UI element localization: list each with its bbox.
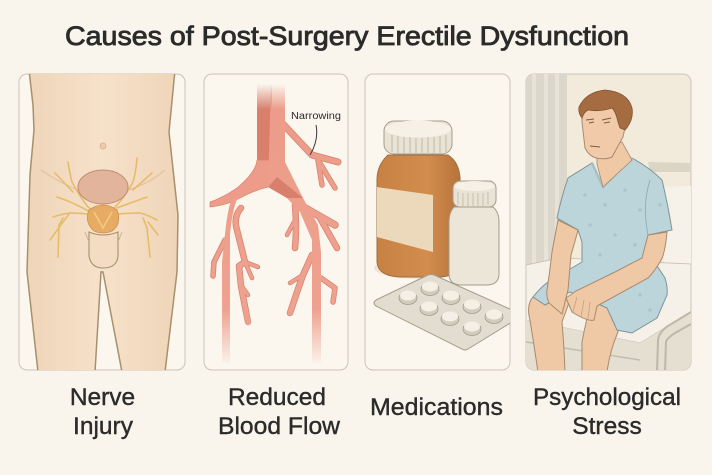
label: reduced blood flow: Reduced bbox=[228, 384, 326, 411]
label: psychological stress bbox=[533, 384, 681, 440]
left arm bbox=[547, 220, 578, 314]
label: reduced blood flow bbox=[218, 384, 340, 440]
icon: bladder bbox=[78, 170, 128, 204]
panel: nerve injury bbox=[19, 70, 185, 372]
right arm bbox=[566, 232, 667, 320]
icon: large bottle bbox=[374, 120, 466, 279]
icon: blister pack bbox=[374, 274, 512, 350]
hair bbox=[579, 90, 632, 130]
neck bbox=[597, 142, 632, 187]
callout: narrowing bbox=[291, 110, 341, 155]
label: nerve injury: Nerve bbox=[70, 384, 135, 411]
title: Causes of Post-Surgery Erectile Dysfunction bbox=[65, 21, 629, 51]
dark trunk bbox=[257, 86, 272, 160]
illustration: bed bbox=[526, 162, 691, 372]
label: reduced blood flow: Blood Flow bbox=[218, 413, 340, 440]
legs bbox=[529, 297, 570, 372]
gown bbox=[533, 158, 672, 333]
illustration: lower torso bbox=[27, 70, 178, 372]
panel: psychological stress bbox=[526, 74, 691, 372]
label: psychological stress: Stress bbox=[572, 413, 642, 440]
label: medications: Medications bbox=[370, 394, 503, 421]
icon: nerves bbox=[50, 158, 158, 257]
main vessels bbox=[210, 160, 275, 207]
label: nerve injury bbox=[70, 384, 135, 440]
label: nerve injury: Injury bbox=[73, 413, 134, 440]
face bbox=[586, 118, 611, 147]
illustration: arteries bbox=[210, 84, 338, 363]
callout: narrowing: Narrowing bbox=[291, 110, 341, 122]
panel: medications bbox=[365, 74, 512, 370]
illustration: man bbox=[529, 90, 672, 372]
icon: small bottle bbox=[449, 181, 499, 285]
icon: penis bbox=[89, 232, 118, 268]
illustration: curtain bbox=[526, 74, 567, 274]
label: psychological stress: Psychological bbox=[533, 384, 681, 411]
icon: prostate bbox=[87, 205, 119, 233]
head bbox=[582, 108, 625, 160]
panel: reduced blood flow bbox=[204, 74, 348, 370]
